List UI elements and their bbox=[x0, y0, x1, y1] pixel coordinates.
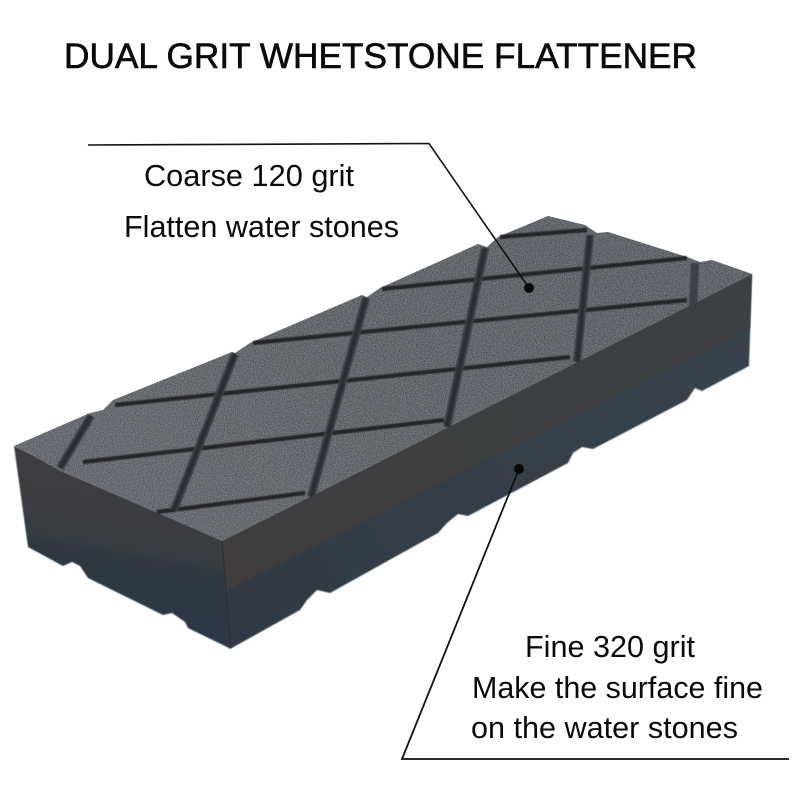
lower fine grit layer bbox=[14, 274, 752, 649]
callout: coarse side bbox=[88, 144, 534, 293]
whetstone illustration bbox=[14, 216, 752, 649]
leader line: fine bbox=[402, 469, 789, 759]
leader line: coarse bbox=[88, 144, 529, 288]
label: coarse purpose: Flatten water stones bbox=[124, 210, 399, 244]
top coarse face bbox=[14, 216, 752, 541]
title: DUAL GRIT WHETSTONE FLATTENER bbox=[64, 37, 697, 76]
leader dot: coarse bbox=[524, 283, 534, 293]
corner edge bbox=[222, 541, 231, 648]
callout: fine side bbox=[402, 464, 789, 759]
label: fine purpose line 1: Make the surface fine bbox=[472, 671, 763, 705]
diamond groove pattern bbox=[60, 230, 695, 512]
label: fine grit: Fine 320 grit bbox=[525, 630, 696, 664]
label: coarse grit: Coarse 120 grit bbox=[144, 159, 355, 193]
label: fine purpose line 2: on the water stones bbox=[471, 711, 738, 745]
leader dot: fine bbox=[514, 464, 524, 474]
upper coarse grit side band bbox=[222, 274, 752, 590]
